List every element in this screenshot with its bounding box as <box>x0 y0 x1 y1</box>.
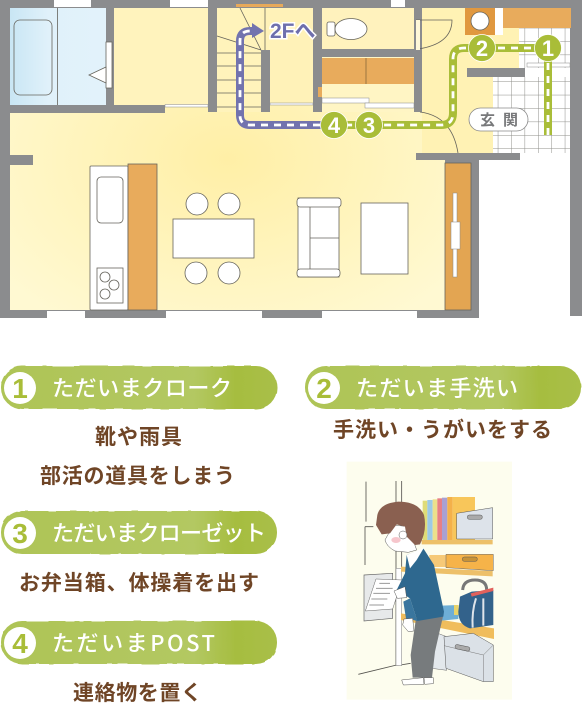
illustration background <box>347 462 512 700</box>
sofa <box>297 198 341 277</box>
panel: kitchen <box>90 164 157 310</box>
storage and basin <box>465 8 571 77</box>
step 4 heading: 4 <box>12 628 28 659</box>
step 1 text: 部活の道具をしまう <box>40 460 235 490</box>
step 4 heading <box>1 621 277 664</box>
door frame and wall lines <box>358 481 411 674</box>
step 2 heading <box>305 366 581 409</box>
panel: entrance hall <box>414 8 519 153</box>
notice board and paper <box>364 573 402 621</box>
route marker 4 <box>320 112 348 138</box>
route marker 2: 2 <box>476 36 488 61</box>
route marker 1: 1 <box>542 36 554 61</box>
white exterior notch <box>479 160 570 318</box>
step 1 text <box>40 421 235 490</box>
rug <box>361 203 408 274</box>
blazer <box>394 548 444 632</box>
panel: washroom <box>114 8 208 105</box>
step 4 heading: ただいまPOST <box>52 626 215 658</box>
walls base <box>0 0 582 318</box>
walls around toilet <box>322 49 422 112</box>
shelves <box>401 540 494 639</box>
step 1 heading <box>1 366 277 409</box>
step 2 heading: 2 <box>316 373 332 404</box>
tile upper area <box>519 28 570 68</box>
panel: storage closet <box>318 58 414 112</box>
panel: stairs <box>165 4 313 112</box>
face <box>385 525 417 552</box>
panel: tiled entrance floor <box>493 77 570 153</box>
dining table and chairs <box>173 193 254 284</box>
step 2 text: 手洗い・うがいをする <box>333 414 552 444</box>
arrow: green route <box>333 48 548 135</box>
route marker 4: 4 <box>328 113 341 138</box>
step 1 text: 靴や雨具 <box>95 421 182 451</box>
label: entrance <box>469 108 528 131</box>
step 3 heading <box>1 511 277 554</box>
step 3 heading: ただいまクローゼット <box>52 516 266 548</box>
panel: toilet <box>322 8 414 49</box>
step 2 heading: ただいま手洗い <box>356 371 518 403</box>
hair <box>376 502 425 545</box>
label: 2F: 2Fへ <box>270 20 316 43</box>
route marker 3: 3 <box>363 113 375 138</box>
route marker 2 <box>468 34 496 62</box>
route marker 3 <box>356 112 382 138</box>
entrance bottom wall <box>416 153 520 160</box>
trousers and shoes <box>402 615 443 685</box>
sideboard <box>445 163 471 310</box>
books and boxes <box>423 497 493 682</box>
ear <box>399 531 407 539</box>
panel: main living room <box>10 8 445 310</box>
cheek <box>391 537 401 543</box>
school bag <box>442 580 493 628</box>
step 3 text: お弁当箱、体操着を出す <box>19 567 259 597</box>
panel: bathroom <box>10 8 112 105</box>
floor plan <box>0 0 582 318</box>
label: entrance: 玄関 <box>480 109 518 130</box>
route marker 1 <box>534 34 562 62</box>
step 1 heading: ただいまクローク <box>52 371 232 403</box>
step 1 heading: 1 <box>12 373 28 404</box>
arrow: route to 2F <box>240 23 333 125</box>
illustration: boy at the shelves <box>347 462 512 700</box>
windows <box>47 0 570 318</box>
step 3 heading: 3 <box>12 518 28 549</box>
